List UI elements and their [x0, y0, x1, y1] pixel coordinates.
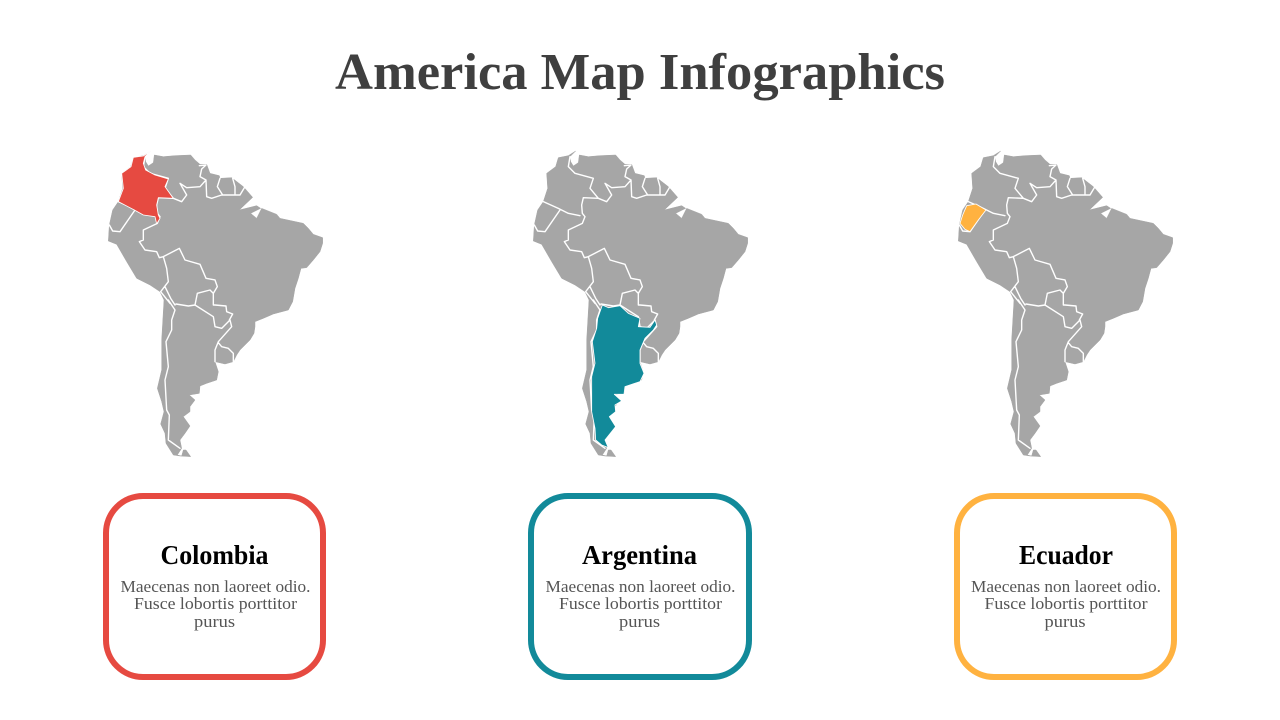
- region: Argentina: [592, 305, 657, 448]
- heading: Colombia: Colombia: [160, 540, 269, 570]
- card: Argentina: [531, 496, 749, 677]
- heading: Argentina: Argentina: [582, 540, 697, 570]
- text: Argentina description: Maecenas non laoreet odio.: [546, 577, 736, 596]
- region: Colombia: [118, 151, 173, 224]
- region: Ecuador: [960, 204, 986, 232]
- text: Colombia description: Fusce lobortis porttitor: [134, 594, 298, 613]
- text: Ecuador description: purus: [1044, 612, 1086, 631]
- map: Argentina highlighted: [533, 151, 748, 457]
- heading: Ecuador: Ecuador: [1019, 540, 1113, 570]
- map: Colombia highlighted: [108, 151, 323, 457]
- text: Argentina description: Fusce lobortis porttitor: [559, 594, 723, 613]
- title: America Map Infographics: [335, 44, 945, 101]
- text: Argentina description: purus: [619, 612, 660, 631]
- text: Ecuador description: Fusce lobortis porttitor: [984, 594, 1148, 613]
- card: Ecuador: [957, 496, 1174, 677]
- text: Ecuador description: [971, 577, 1161, 631]
- card: Colombia: [106, 496, 323, 677]
- text: Argentina description: [546, 577, 736, 631]
- map: Ecuador highlighted: [958, 151, 1173, 457]
- text: Colombia description: purus: [194, 612, 235, 631]
- text: Colombia description: Maecenas non laoreet odio.: [120, 577, 310, 596]
- text: Colombia description: [120, 577, 310, 631]
- text: Ecuador description: Maecenas non laoreet odio.: [971, 577, 1161, 596]
